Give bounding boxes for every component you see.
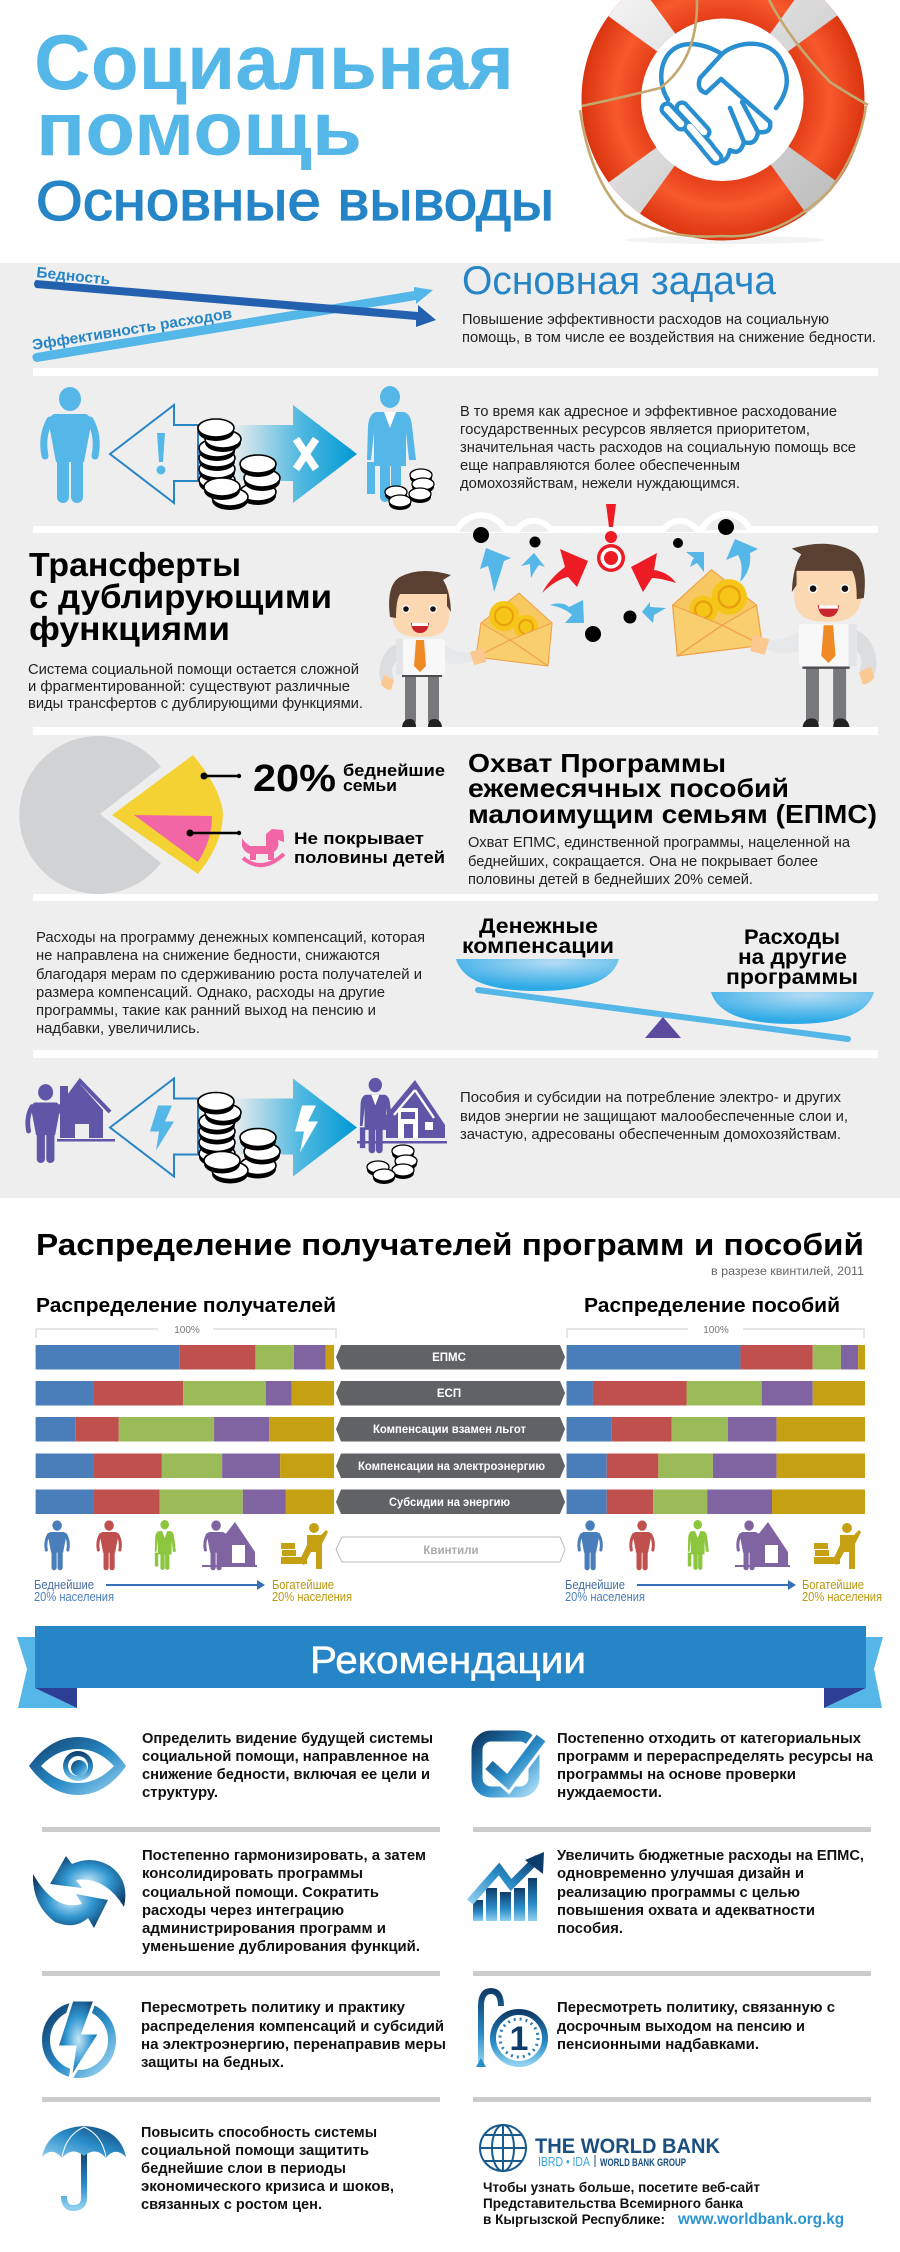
- text block: duplicated transfers: [28, 546, 363, 712]
- text block: energy subsidies: видов энергии не защищают малообеспеченные слои и,: [460, 1109, 848, 1125]
- text block: recommendation 2: [557, 1731, 874, 1801]
- text block: recommendation 4: [557, 1848, 864, 1937]
- logo: World Bank: WORLD BANK GROUP: [600, 2157, 686, 2169]
- text block: website note: [483, 2180, 844, 2228]
- text block: recommendation 7: [141, 2125, 394, 2213]
- chart: recipients distribution bars: [36, 1295, 336, 1514]
- text block: cash compensation spending: Расходы на программу денежных компенсаций, которая: [36, 930, 425, 946]
- left man with envelope: [379, 571, 552, 727]
- legend: quintile scale right: 20% населения: [565, 1589, 645, 1604]
- text block: duplicated transfers: и фрагментированной: существуют различные: [28, 679, 350, 695]
- blue arrows: [480, 539, 758, 623]
- text block: recommendation 3: консолидировать программы: [142, 1866, 363, 1882]
- stat: 20 percent poorest families: [253, 758, 445, 800]
- program labels: [336, 1345, 565, 1562]
- text block: recommendation 6: пенсионными надбавками.: [557, 2037, 759, 2053]
- text block: recommendation 7: социальной помощи защитить: [141, 2143, 369, 2159]
- banner: recommendations: Рекомендации: [310, 1640, 586, 1682]
- text block: main task: [462, 259, 876, 346]
- text block: website note: в Кыргызской Республике:: [483, 2212, 665, 2227]
- right man with envelope: [673, 544, 877, 728]
- icon: rich person with coins: [367, 386, 434, 510]
- chart: balance scale: Денежные: [479, 915, 598, 938]
- chart: benefits distribution bars: 100%: [703, 1325, 729, 1336]
- program labels: ЕСП: [437, 1388, 461, 1400]
- icon: circular arrows: [33, 1856, 125, 1928]
- handshake outline: [661, 44, 787, 162]
- stat: 20 percent poorest families: беднейшие: [343, 761, 445, 780]
- text block: recommendation 5: защиты на бедных.: [141, 2055, 284, 2071]
- text block: recommendation 2: нуждаемости.: [557, 1785, 662, 1801]
- banner: recommendations: [17, 1626, 883, 1708]
- chart: poverty and spending efficiency arrows: [31, 264, 436, 362]
- heading: distribution: Распределение получателей программ и пособий: [36, 1227, 864, 1262]
- legend: quintile scale left: Беднейшие: [34, 1577, 94, 1592]
- text block: duplicated transfers: Трансферты: [29, 546, 241, 583]
- chart: balance scale: на другие: [738, 946, 847, 969]
- icon: life ring with handshake: [580, 0, 868, 244]
- text block: recommendation 3: [142, 1848, 426, 1955]
- stat: half of children not covered: [294, 829, 445, 867]
- dots with white halos: [456, 514, 750, 642]
- title: Основные выводы: [36, 169, 554, 232]
- icon: rocking horse: [242, 829, 284, 865]
- text block: website note: www.worldbank.org.kg: [677, 2211, 844, 2228]
- text block: EPMS coverage: половины детей в беднейших 20% семей.: [468, 872, 753, 888]
- chart: benefits distribution bars: [567, 1295, 865, 1514]
- text block: cash compensation spending: надбавки, увеличились.: [36, 1021, 200, 1037]
- text block: recommendation 7: экономического кризиса и шоков,: [141, 2179, 394, 2195]
- title: помощь: [36, 87, 362, 172]
- legend: quintile scale right: Богатейшие: [802, 1577, 864, 1592]
- chart: benefits distribution bars: Распределение пособий: [584, 1295, 840, 1317]
- legend: quintile scale right: Беднейшие: [565, 1577, 625, 1592]
- icon: cane and medal: [476, 1991, 545, 2067]
- text block: duplicated transfers: виды трансфертов с дублирующими функциями.: [28, 696, 363, 712]
- text block: main task: Основная задача: [462, 259, 777, 303]
- chart: balance scale: компенсации: [462, 935, 614, 958]
- text block: spending priority: домохозяйствам, нежели нуждающимся.: [460, 476, 740, 492]
- icon: energy money arrows with coins: [110, 1078, 357, 1184]
- icon: lightning: [46, 2000, 112, 2080]
- text block: spending priority: государственных ресурсов является приоритетом,: [460, 422, 810, 438]
- program labels: ЕПМС: [432, 1352, 466, 1364]
- text block: recommendation 2: программы на основе проверки: [557, 1767, 796, 1783]
- chart: poverty and spending efficiency arrows: Эффективность расходов: [31, 305, 233, 354]
- text block: cash compensation spending: не направлена на снижение бедности, снижаются: [36, 948, 380, 964]
- heading: distribution: в разрезе квинтилей, 2011: [711, 1264, 864, 1278]
- text block: spending priority: значительная часть расходов на социальную помощь все: [460, 440, 856, 456]
- program labels: Компенсации взамен льгот: [373, 1424, 526, 1436]
- text block: EPMS coverage: [468, 748, 877, 888]
- text block: recommendation 1: структуру.: [142, 1785, 218, 1801]
- text block: main task: помощь, в том числе ее воздействия на снижение бедности.: [462, 330, 876, 346]
- text block: recommendation 5: [141, 2000, 446, 2071]
- legend: quintile scale left: 20% населения: [34, 1589, 114, 1604]
- illustration: duplicated transfers scene: [379, 504, 877, 728]
- rope: [580, 0, 868, 237]
- text block: spending priority: еще направляются более обеспеченным: [460, 458, 740, 474]
- text block: recommendation 1: Определить видение будущей системы: [142, 1731, 433, 1747]
- icon: check mark: [477, 1736, 541, 1792]
- text block: recommendation 6: [557, 2000, 835, 2053]
- text block: EPMS coverage: Охват ЕПМС, единственной программы, нацеленной на: [468, 835, 851, 851]
- text block: duplicated transfers: Система социальной помощи остается сложной: [28, 662, 359, 678]
- text block: recommendation 3: администрирования программ и: [142, 1921, 386, 1937]
- text block: spending priority: [460, 404, 856, 492]
- icon: umbrella: [42, 2126, 126, 2208]
- text block: cash compensation spending: программы, такие как ранний выход на пенсию и: [36, 1003, 376, 1019]
- panel: key findings background: [0, 263, 900, 1198]
- chart: balance scale: [456, 915, 874, 1039]
- text block: recommendation 4: повышения охвата и адекватности: [557, 1903, 815, 1919]
- icons: quintiles right: [579, 1520, 861, 1569]
- program labels: Компенсации на электроэнергию: [358, 1461, 545, 1473]
- stat: half of children not covered: Не покрывает: [294, 829, 424, 848]
- legend: quintile scale right: 20% населения: [802, 1589, 882, 1604]
- text block: recommendation 4: реализацию программы с целью: [557, 1885, 800, 1901]
- chart: recipients distribution bars: Распределение получателей: [36, 1295, 336, 1317]
- text block: recommendation 3: уменьшение дублирования функций.: [142, 1939, 420, 1955]
- logo: World Bank: THE WORLD BANK: [535, 2135, 720, 2158]
- chart: balance scale: Расходы: [744, 926, 840, 949]
- legend: quintile scale left: 20% населения: [272, 1589, 352, 1604]
- text block: recommendation 4: одновременно улучшая дизайн и: [557, 1866, 804, 1882]
- text block: duplicated transfers: функциями: [29, 610, 230, 647]
- program labels: Субсидии на энергию: [389, 1497, 510, 1509]
- stat: 20 percent poorest families: семьи: [343, 776, 397, 795]
- icon: eye: [29, 1737, 126, 1795]
- red arrows: [542, 549, 676, 593]
- legend: quintile scale right: [565, 1577, 882, 1604]
- text block: energy subsidies: [460, 1090, 848, 1143]
- icon: poor person with small house: [28, 1081, 115, 1159]
- chart: poverty and spending efficiency arrows: Бедность: [36, 264, 111, 289]
- chart: recipients distribution bars: 100%: [174, 1325, 200, 1336]
- chart: coverage pie: [19, 736, 241, 894]
- text block: EPMS coverage: малоимущим семьям (ЕПМС): [468, 799, 877, 829]
- title: [34, 18, 554, 232]
- text block: recommendation 7: связанных с ростом цен.: [141, 2197, 322, 2213]
- logo: World Bank: IBRD • IDA: [538, 2155, 591, 2169]
- text block: recommendation 6: досрочным выходом на пенсию и: [557, 2019, 805, 2035]
- icons: quintiles left: [46, 1520, 328, 1569]
- text block: recommendation 7: беднейшие слои в периоды: [141, 2161, 346, 2177]
- warning target: [597, 504, 625, 572]
- icon: rich person with large house and coins: [357, 1078, 447, 1184]
- text block: recommendation 3: Постепенно гармонизировать, а затем: [142, 1848, 426, 1864]
- text block: recommendation 3: расходы через интеграцию: [142, 1903, 344, 1919]
- text block: EPMS coverage: Охват Программы: [468, 748, 726, 778]
- text block: recommendation 1: снижение бедности, включая ее цели и: [142, 1767, 430, 1783]
- icon: cane and medal: 1: [510, 2020, 528, 2058]
- text block: recommendation 1: [142, 1731, 433, 1801]
- chart: balance scale: программы: [726, 966, 858, 989]
- text block: website note: Представительства Всемирного банка: [483, 2196, 743, 2211]
- icon: money arrows with coins: [110, 405, 357, 510]
- text block: website note: Чтобы узнать больше, посетите веб-сайт: [483, 2180, 760, 2195]
- text block: energy subsidies: зачастую, адресованы обеспеченным домохозяйствам.: [460, 1127, 841, 1143]
- text block: recommendation 6: Пересмотреть политику, связанную с: [557, 2000, 835, 2016]
- legend: quintile scale left: [34, 1577, 352, 1604]
- icon: growth chart: [470, 1852, 544, 1921]
- text block: duplicated transfers: с дублирующими: [29, 578, 332, 615]
- text block: recommendation 5: на электроэнергию, перенаправив меры: [141, 2037, 446, 2053]
- text block: recommendation 7: Повысить способность системы: [141, 2125, 377, 2141]
- text block: cash compensation spending: размера компенсаций. Однако, расходы на другие: [36, 985, 385, 1001]
- program labels: Квинтили: [423, 1545, 479, 1557]
- text block: recommendation 4: Увеличить бюджетные расходы на ЕПМС,: [557, 1848, 864, 1864]
- text block: recommendation 3: социальной помощи. Сократить: [142, 1885, 379, 1901]
- text block: recommendation 5: Пересмотреть политику и практику: [141, 2000, 405, 2016]
- heading: distribution: [36, 1227, 864, 1278]
- stat: half of children not covered: половины детей: [294, 848, 445, 867]
- title: Социальная: [34, 18, 514, 106]
- text block: EPMS coverage: ежемесячных пособий: [468, 773, 789, 803]
- text block: cash compensation spending: [36, 930, 425, 1037]
- text block: recommendation 1: социальной помощи, направленное на: [142, 1749, 430, 1765]
- text block: energy subsidies: Пособия и субсидии на потребление электро- и других: [460, 1090, 842, 1106]
- text block: spending priority: В то время как адресное и эффективное расходование: [460, 404, 837, 420]
- text block: recommendation 2: программ и перераспределять ресурсы на: [557, 1749, 874, 1765]
- text block: recommendation 4: пособия.: [557, 1921, 623, 1937]
- text block: main task: Повышение эффективности расходов на социальную: [462, 312, 829, 328]
- text block: cash compensation spending: благодаря мерам по сдерживанию роста получателей и: [36, 967, 422, 983]
- text block: recommendation 5: распределения компенсаций и субсидий: [141, 2019, 444, 2035]
- text block: EPMS coverage: беднейших, сокращается. Она не покрывает более: [468, 854, 818, 870]
- icon: poor person: [44, 387, 96, 497]
- text block: recommendation 2: Постепенно отходить от категориальных: [557, 1731, 861, 1747]
- legend: quintile scale left: Богатейшие: [272, 1577, 334, 1592]
- logo: World Bank: [480, 2125, 720, 2171]
- stat: 20 percent poorest families: 20%: [253, 758, 336, 800]
